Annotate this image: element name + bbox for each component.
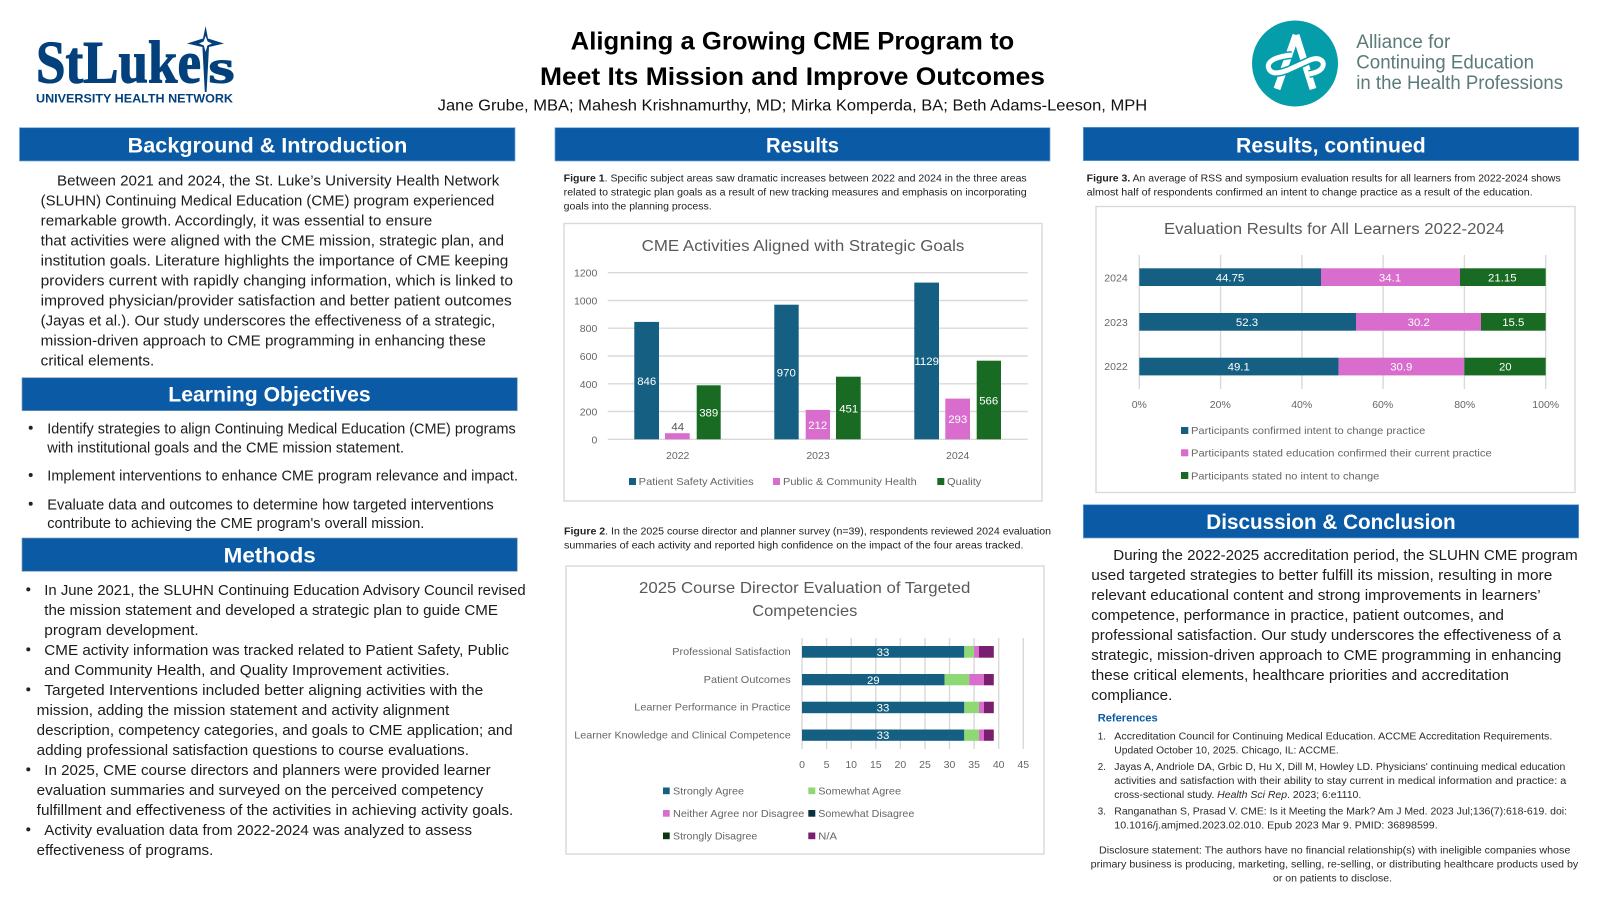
- legend: Strongly Agree: [673, 786, 744, 798]
- references: 1.: [1098, 731, 1106, 742]
- text block: discussion: compliance.: [1091, 688, 1172, 704]
- heading: background and introduction: Background & Introduction: [128, 134, 407, 157]
- panel: discussion and conclusion: [1083, 505, 1579, 884]
- stacked bars: 30.9: [1390, 362, 1412, 374]
- references: Accreditation Council for Continuing Medical Education. ACCME Accreditation Requirements.: [1114, 731, 1552, 742]
- list: methods: Activity evaluation data from 2022-2024 was analyzed to assess: [44, 823, 472, 839]
- heading: results continued: [1083, 127, 1579, 161]
- data labels: 212: [808, 420, 827, 432]
- axis labels: 400: [580, 379, 597, 391]
- category labels: Professional Satisfaction: [672, 646, 791, 658]
- axis tick labels: 30: [944, 759, 955, 771]
- chart: CME activities aligned with strategic goals: [564, 224, 1042, 501]
- panel: results continued: [1083, 127, 1579, 493]
- axis labels: 1000: [574, 296, 597, 308]
- caption: figure 1: Figure 1 . Specific subject areas saw dramatic increases between 2022 and 2024 in the three areas: [564, 174, 1027, 185]
- text block: background: Between 2021 and 2024, the St. Luke’s University Health Network: [57, 173, 500, 189]
- list: objectives: [29, 421, 518, 532]
- list: objectives: contribute to achieving the CME program's overall mission.: [47, 516, 424, 532]
- axis labels: 0: [591, 434, 597, 446]
- stacked bars: 33: [877, 702, 889, 714]
- axis labels: 2022: [1104, 361, 1128, 373]
- stacked bars: 52.3: [1236, 317, 1258, 329]
- logo: St. Luke's University Health Network: s: [208, 42, 234, 94]
- text block: discussion: strategic, mission-driven approach to CME programming in enhancing: [1091, 648, 1561, 664]
- references: Ranganathan S, Prasad V. CME: Is it Meeting the Mark? Am J Med. 2023 Jul;136(7):618-619. doi:: [1114, 807, 1567, 818]
- disclosure statement: [1091, 845, 1578, 884]
- axis tick labels: 20: [895, 759, 906, 771]
- axis tick labels: 15: [870, 759, 882, 771]
- list: objectives: Identify strategies to align Continuing Medical Education (CME) programs: [47, 421, 516, 437]
- references: [1098, 713, 1567, 832]
- heading: learning objectives: Learning Objectives: [168, 384, 371, 407]
- axis labels: 0%: [1132, 399, 1147, 411]
- caption: figure 2: [564, 526, 1051, 552]
- heading: methods: [22, 538, 517, 571]
- list: methods: adding professional satisfaction questions to course evaluations.: [37, 743, 469, 759]
- list: methods: evaluation summaries and surveyed on the perceived competency: [37, 783, 484, 799]
- caption: figure 1: related to strategic plan goals as a result of new tracking measures and emphasis on incorporating: [564, 188, 1027, 198]
- axis tick labels: 25: [919, 759, 931, 771]
- logo: Alliance for Continuing Education in the Health Professions: Alliance for: [1356, 32, 1451, 53]
- text block: discussion: relevant educational content and strong improvements in learners’: [1091, 588, 1541, 604]
- caption: figure 3: Figure 3. An average of RSS and symposium evaluation results for all learners from 2022-2024 shows: [1087, 174, 1561, 184]
- stacked bars: 49.1: [1228, 362, 1250, 374]
- list: methods: Targeted Interventions included better aligning activities with the: [44, 683, 483, 699]
- caption: figure 3: [1087, 174, 1561, 198]
- references: References: [1098, 713, 1158, 725]
- text block: background: improved physician/provider satisfaction and better patient outcomes: [41, 293, 512, 309]
- heading: results: Results: [766, 134, 839, 157]
- text block: background: that activities were aligned with the CME mission, strategic plan, and: [41, 233, 504, 249]
- disclosure statement: or on patients to disclose.: [1273, 873, 1392, 884]
- list: methods: program development.: [44, 623, 199, 639]
- list: methods: In 2025, CME course directors and planners were provided learner: [44, 763, 491, 779]
- chart: evaluation results for all learners: Evaluation Results for All Learners 2022-2024: [1164, 221, 1505, 238]
- list: methods: fulfillment and effectiveness of the activities in achieving activity goals.: [37, 803, 513, 819]
- heading: methods: Methods: [224, 544, 316, 567]
- axis labels: 2024: [946, 450, 970, 462]
- chart: evaluation results for all learners: [1096, 206, 1575, 492]
- text block: background: providers current with rapidly changing information, which is linked to: [41, 273, 513, 289]
- heading: learning objectives: [22, 378, 517, 411]
- logo: Alliance for Continuing Education in the Health Professions: [1252, 20, 1563, 106]
- axis tick labels: 35: [968, 759, 980, 771]
- axis labels: 1200: [574, 268, 597, 280]
- legend: N/A: [818, 830, 837, 842]
- text block: background: institution goals. Literature highlights the importance of CME keeping: [41, 253, 508, 269]
- axis labels: 20%: [1210, 399, 1231, 411]
- chart: 2025 course director evaluation: 2025 Course Director Evaluation of Targeted: [639, 580, 970, 597]
- heading: results: [555, 128, 1050, 161]
- legend: Patient Safety Activities: [639, 476, 754, 488]
- list: objectives: Evaluate data and outcomes to determine how targeted interventions: [47, 497, 494, 513]
- references: 3.: [1098, 807, 1106, 818]
- panel: results: [555, 128, 1051, 854]
- stacked bars: 33: [877, 647, 889, 659]
- axis labels: 800: [580, 323, 597, 335]
- stacked bars: [1139, 268, 1546, 375]
- legend: Somewhat Disagree: [818, 808, 914, 820]
- text block: discussion: [1091, 548, 1578, 704]
- data labels: 44: [671, 422, 684, 434]
- axis labels: 2023: [1104, 317, 1128, 329]
- authors: Jane Grube, MBA; Mahesh Krishnamurthy, MD; Mirka Komperda, BA; Beth Adams-Leeson, MPH: [438, 98, 1147, 115]
- heading: discussion and conclusion: Discussion & Conclusion: [1206, 511, 1456, 534]
- axis tick labels: 45: [1017, 759, 1029, 771]
- axis labels: 60%: [1372, 399, 1393, 411]
- stacked bars: 20: [1499, 362, 1512, 374]
- references: cross-sectional study. Health Sci Rep . 2023; 6:e1110.: [1114, 790, 1361, 801]
- logo: Alliance for Continuing Education in the Health Professions: in the Health Professions: [1356, 73, 1563, 94]
- legend: Somewhat Agree: [818, 786, 901, 798]
- references: 2.: [1098, 762, 1106, 773]
- axis labels: 2022: [666, 450, 690, 462]
- legend: Participants confirmed intent to change practice: [1191, 425, 1425, 437]
- references: 10.1016/j.amjmed.2023.02.010. Epub 2023 Mar 9. PMID: 36898599.: [1114, 821, 1438, 832]
- list: methods: and Community Health, and Quality Improvement activities.: [44, 663, 450, 679]
- legend: Neither Agree nor Disagree: [673, 808, 804, 820]
- stacked bars: 34.1: [1379, 272, 1401, 284]
- data labels: 293: [948, 414, 967, 426]
- bars: [634, 283, 1001, 439]
- data labels: 566: [979, 396, 998, 408]
- axis tick labels: 5: [824, 759, 830, 771]
- data labels: 1129: [914, 356, 939, 368]
- chart: 2025 course director evaluation: [566, 566, 1044, 854]
- list: methods: CME activity information was tracked related to Patient Safety, Public: [44, 643, 510, 659]
- title: Aligning a Growing CME Program to: [571, 27, 1014, 55]
- axis labels: 2023: [806, 450, 830, 462]
- list: methods: description, competency categories, and goals to CME application; and: [37, 723, 513, 739]
- chart: 2025 course director evaluation: Competencies: [752, 603, 857, 620]
- stacked bars: [802, 646, 994, 742]
- panel: methods: [22, 538, 526, 859]
- axis tick labels: 40: [993, 759, 1005, 771]
- panel: learning objectives: [22, 378, 518, 532]
- stacked bars: 44.75: [1216, 272, 1244, 284]
- list: methods: the mission statement and developed a strategic plan to guide CME: [44, 603, 498, 619]
- text block: discussion: professional satisfaction. Our study underscores the effectiveness of a: [1091, 628, 1562, 644]
- text block: background: critical elements.: [41, 353, 154, 369]
- axis labels: 80%: [1454, 399, 1475, 411]
- panel: background and introduction: [20, 128, 515, 369]
- caption: figure 3: almost half of respondents confirmed an intent to change practice as a result of the education.: [1087, 188, 1533, 198]
- stacked bars: 15.5: [1502, 317, 1524, 329]
- list: methods: effectiveness of programs.: [37, 843, 213, 859]
- legend: [663, 786, 914, 842]
- category labels: Patient Outcomes: [704, 674, 791, 686]
- axis labels: 40%: [1291, 399, 1312, 411]
- title: [540, 27, 1045, 91]
- axis labels: 100%: [1532, 399, 1559, 411]
- stacked bars: 21.15: [1488, 272, 1517, 284]
- list: methods: mission, adding the mission statement and activity alignment: [37, 703, 449, 719]
- list: objectives: Implement interventions to enhance CME program relevance and impact.: [47, 469, 518, 485]
- text block: discussion: these critical elements, healthcare priorities and accreditation: [1091, 668, 1509, 684]
- references: Jayas A, Andriole DA, Grbic D, Hu X, Dill M, Howley LD. Physicians' continuing medical education: [1114, 762, 1565, 773]
- references: Updated October 10, 2025. Chicago, IL: ACCME.: [1114, 745, 1339, 756]
- legend: Strongly Disagree: [673, 830, 757, 842]
- references: activities and satisfaction with their ability to stay current in medical information and practice: a: [1114, 776, 1567, 787]
- axis tick labels: 10: [845, 759, 857, 771]
- stacked bars: 33: [877, 730, 889, 742]
- legend: Quality: [947, 476, 982, 488]
- axis labels: [1104, 272, 1559, 411]
- logo: St. Luke's University Health Network: StLuke: [36, 30, 201, 96]
- list: objectives: with institutional goals and the CME mission statement.: [46, 440, 404, 456]
- text block: background: mission-driven approach to CME programming in enhancing these: [41, 333, 486, 349]
- legend: Participants stated no intent to change: [1191, 470, 1379, 482]
- disclosure statement: Disclosure statement: The authors have no financial relationship(s) with ineligible companies whose: [1099, 845, 1571, 856]
- caption: figure 2: summaries of each activity and reported high confidence on the impact of the four areas tracked.: [564, 540, 1024, 552]
- legend: Public & Community Health: [783, 476, 917, 488]
- title: Meet Its Mission and Improve Outcomes: [540, 63, 1045, 91]
- category labels: Learner Knowledge and Clinical Competence: [574, 730, 791, 742]
- axis labels: 200: [580, 406, 597, 418]
- legend: [629, 476, 982, 488]
- caption: figure 1: goals into the planning process.: [564, 201, 712, 212]
- text block: background: remarkable growth. Accordingly, it was essential to ensure: [41, 213, 432, 229]
- category labels: [574, 646, 791, 742]
- text block: discussion: competence, performance in practice, patient outcomes, and: [1091, 608, 1504, 624]
- data labels: 970: [777, 368, 796, 380]
- axis labels: 2024: [1104, 272, 1128, 284]
- heading: discussion and conclusion: [1083, 505, 1579, 538]
- legend: [1181, 425, 1492, 482]
- list: methods: [26, 583, 526, 859]
- axis tick labels: [799, 759, 1029, 771]
- axis tick labels: 0: [799, 759, 805, 771]
- logo: Alliance for Continuing Education in the Health Professions: Continuing Education: [1356, 52, 1534, 74]
- caption: figure 2: Figure 2 . In the 2025 course director and planner survey (n=39), respondents reviewed 2024 evaluation: [564, 526, 1051, 538]
- text block: background: (Jayas et al.). Our study underscores the effectiveness of a strategic,: [41, 313, 495, 329]
- text block: background: [41, 173, 513, 369]
- list: methods: In June 2021, the SLUHN Continuing Education Advisory Council revised: [44, 583, 526, 599]
- text block: discussion: used targeted strategies to better fulfill its mission, resulting in more: [1091, 568, 1552, 584]
- disclosure statement: primary business is producing, marketing, selling, re-selling, or distributing healthcare products used by: [1091, 859, 1578, 870]
- category labels: Learner Performance in Practice: [634, 702, 791, 714]
- stacked bars: 29: [867, 675, 880, 687]
- caption: figure 1: [564, 174, 1027, 212]
- heading: background and introduction: [20, 128, 515, 161]
- legend: Participants stated education confirmed their current practice: [1191, 448, 1492, 460]
- axis labels: [574, 268, 970, 462]
- data labels: 451: [839, 403, 858, 415]
- axis labels: 600: [580, 351, 597, 363]
- chart: CME activities aligned with strategic goals: CME Activities Aligned with Strategic Goals: [642, 238, 965, 255]
- data labels: [637, 356, 998, 434]
- heading: results continued: Results, continued: [1236, 135, 1426, 158]
- stacked bars: 30.2: [1408, 317, 1430, 329]
- data labels: 389: [699, 408, 718, 420]
- text block: background: (SLUHN) Continuing Medical Education (CME) program experienced: [41, 193, 494, 209]
- data labels: 846: [637, 376, 656, 388]
- text block: discussion: During the 2022-2025 accreditation period, the SLUHN CME program: [1113, 548, 1578, 564]
- logo: St. Luke's University Health Network: UNIVERSITY HEALTH NETWORK: [36, 94, 234, 106]
